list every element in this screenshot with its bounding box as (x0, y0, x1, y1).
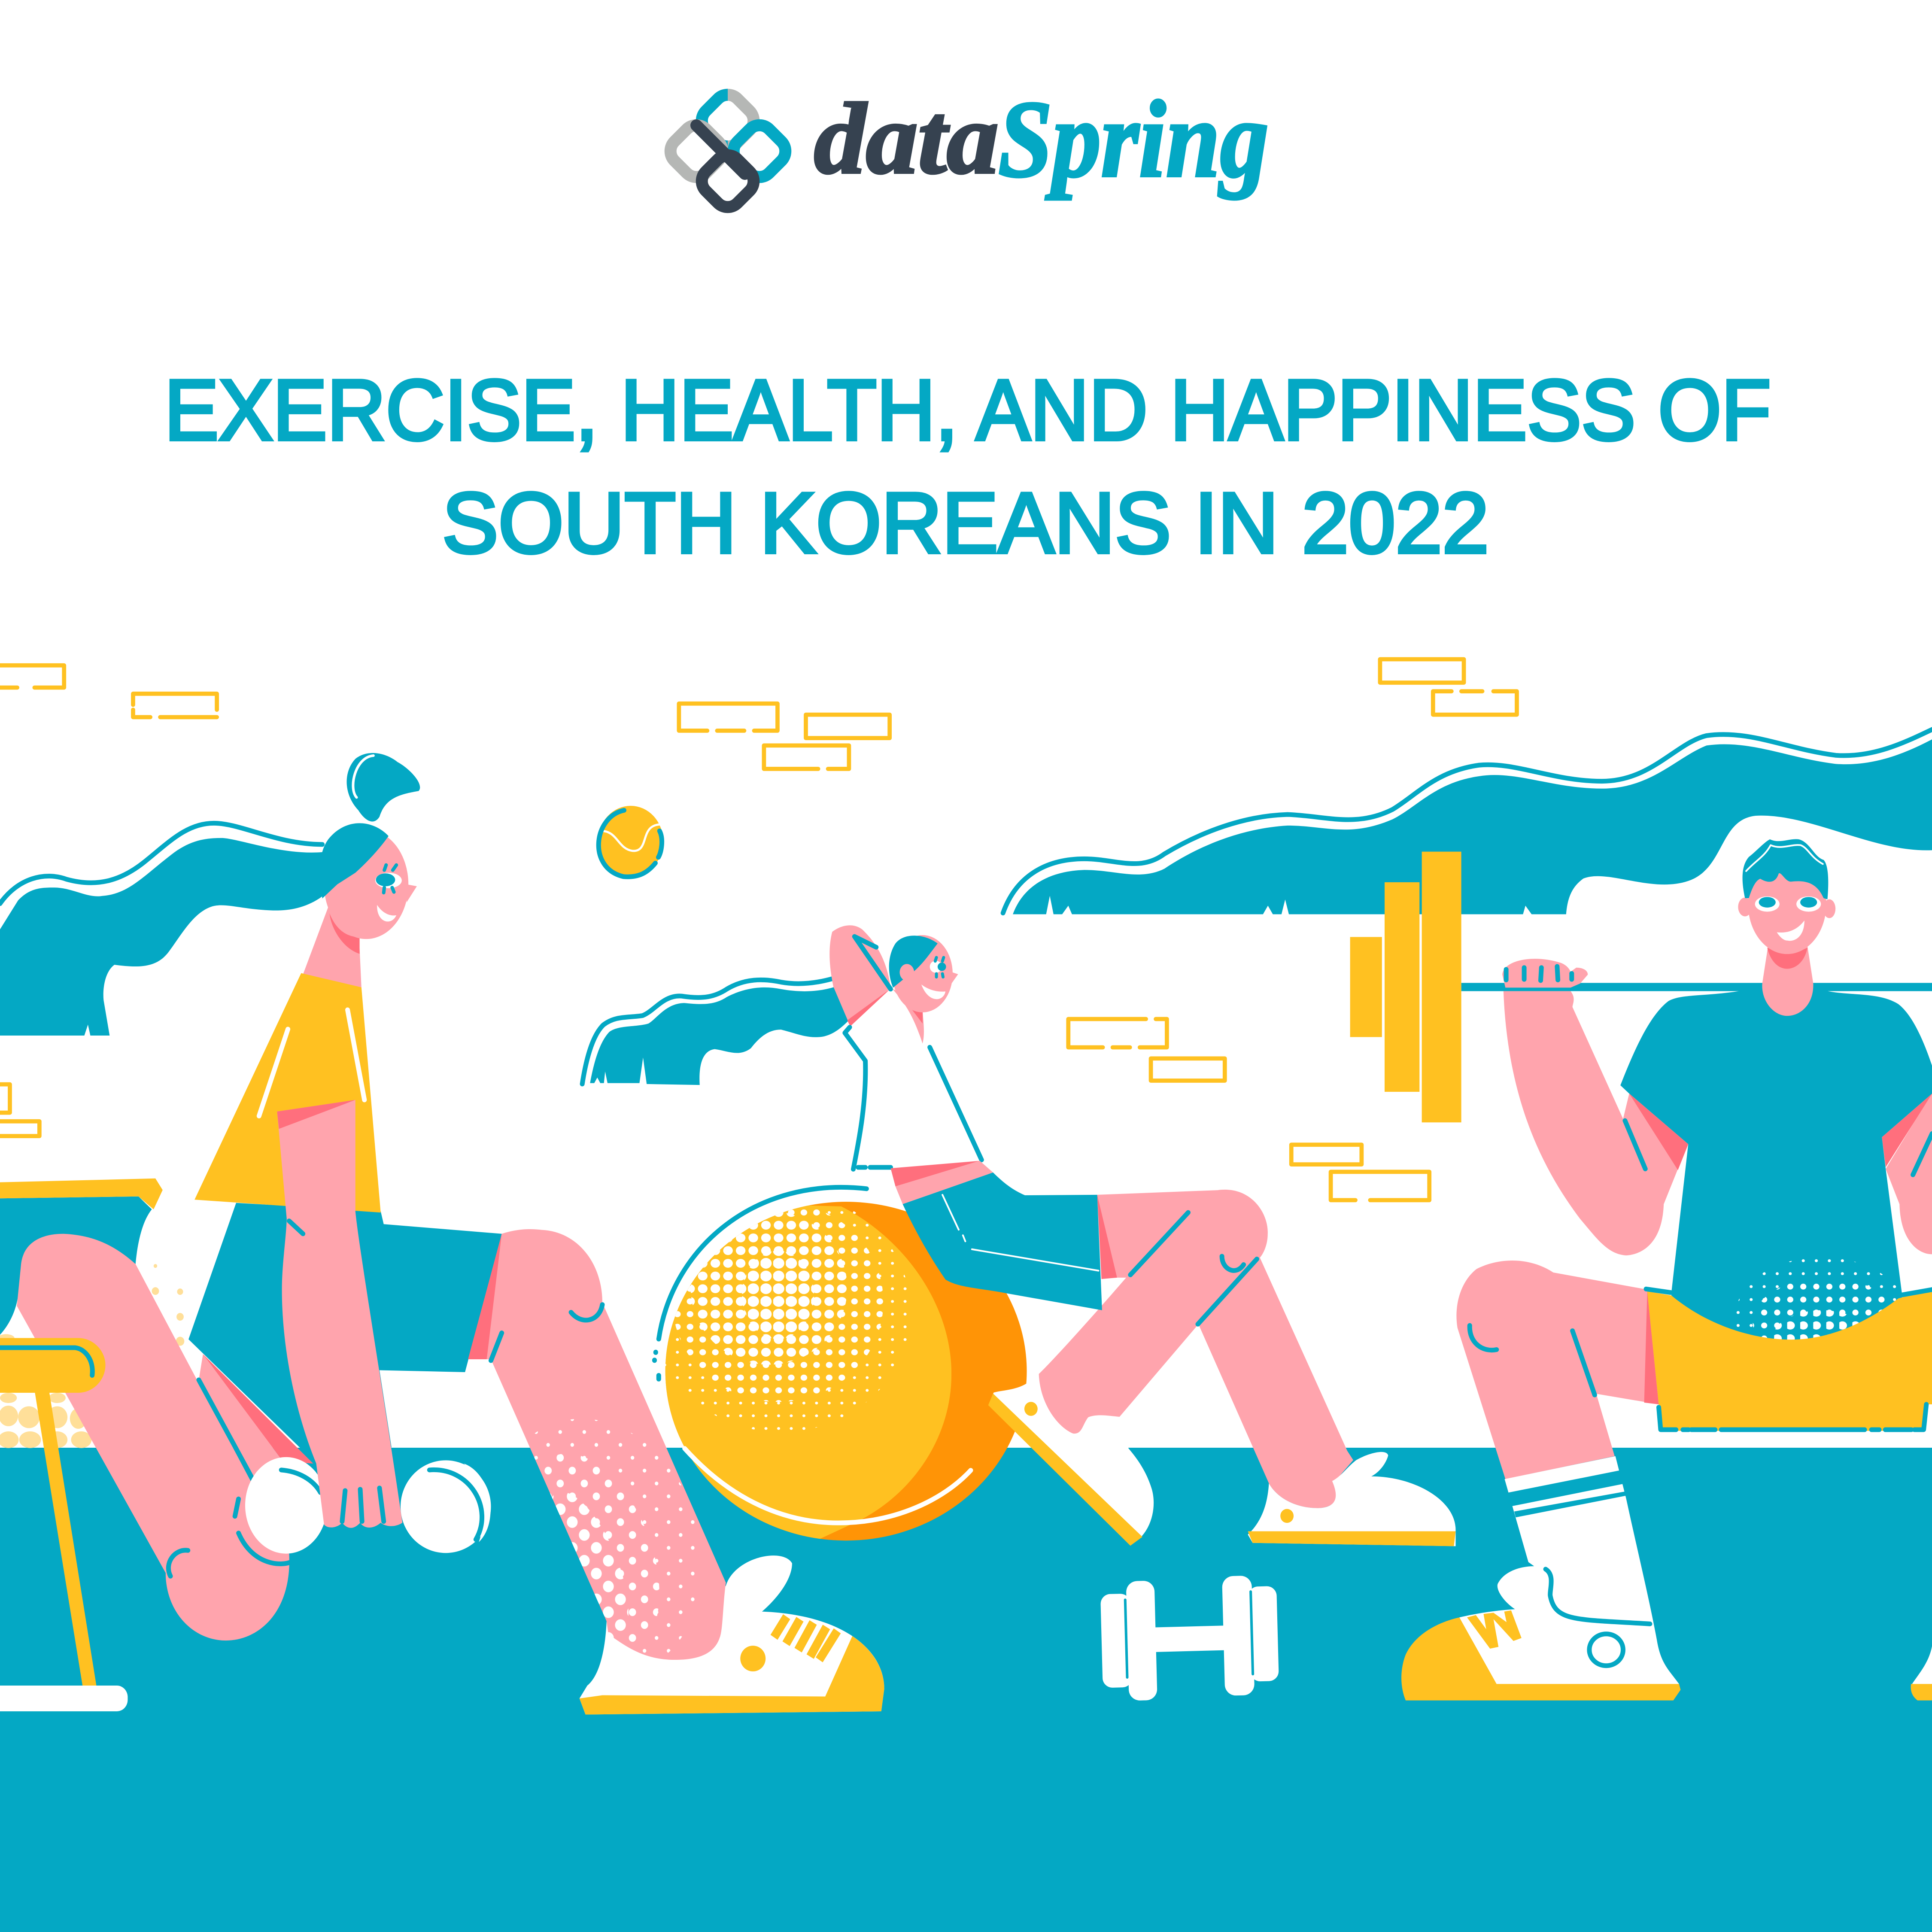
lower leg (1198, 1258, 1353, 1508)
ball orange body (665, 1202, 1027, 1540)
dumbbell left weight (235, 1457, 327, 1564)
left leg details (168, 1380, 251, 1576)
hair (582, 978, 850, 1085)
sneaker (580, 1555, 884, 1714)
bench back (0, 1179, 163, 1335)
logo wordmark: data (814, 83, 999, 195)
woman on gym ball (582, 925, 1455, 1546)
title: SOUTH KOREANS IN 2022 (442, 475, 1489, 571)
ball yellow face (665, 1206, 951, 1539)
yellow outlined bricks (0, 659, 1517, 1200)
tennis ball (598, 806, 663, 877)
dumbbell on floor (1100, 1575, 1279, 1701)
white top outline (845, 1027, 981, 1169)
raised arm (829, 925, 890, 1027)
thigh (1456, 1261, 1659, 1479)
head (889, 935, 958, 1044)
logo icon: interlocking diamonds (665, 89, 791, 213)
shorts and far leg (188, 1203, 502, 1479)
second sneaker at edge (1911, 1646, 1932, 1701)
leg halftone (470, 1373, 759, 1683)
front leg (468, 1229, 884, 1714)
hand gripping bar (1502, 959, 1588, 987)
sock and sneaker (1401, 1456, 1680, 1701)
rear sneaker (988, 1381, 1154, 1546)
arm holding dumbbell (277, 1100, 402, 1528)
left leg (17, 1234, 289, 1640)
title: EXERCISE, HEALTH, AND HAPPINESS OF (164, 362, 1771, 458)
ball teal outline arc (654, 1187, 866, 1379)
title (164, 362, 1771, 571)
t-shirt (1620, 987, 1932, 1346)
teal floor (0, 1448, 1932, 1932)
woman's head (320, 823, 417, 939)
bench seat and leg (0, 1338, 128, 1711)
logo: dataSpring (665, 79, 1269, 213)
halftone highlight (665, 1209, 907, 1430)
shirt halftone (1735, 1257, 1908, 1375)
barbell plates (1350, 852, 1461, 1122)
right arm (1882, 1092, 1932, 1254)
man's head (1738, 839, 1835, 954)
yellow t-shirt (194, 907, 381, 1212)
front sneaker (1248, 1452, 1455, 1546)
pale yellow dots (0, 1264, 184, 1448)
gym ball (648, 1187, 1027, 1549)
hair bun (347, 753, 420, 821)
barbell (1350, 852, 1932, 1122)
barbell lifter's flowing hair (1003, 729, 1932, 914)
pink leg (486, 1229, 726, 1660)
barbell bar (1461, 983, 1932, 991)
raised arm (1504, 991, 1688, 1255)
ball white rim arc (685, 1449, 971, 1523)
logo wordmark accent: Spring (998, 79, 1269, 200)
neck (1762, 946, 1813, 1016)
woman with dumbbells (0, 753, 884, 1714)
dumbbell right weight (401, 1460, 491, 1553)
thigh (1039, 1190, 1268, 1434)
yellow shorts (1646, 1289, 1932, 1431)
hair (0, 823, 386, 1036)
man lifting barbell (1401, 839, 1932, 1701)
shorts (890, 1161, 1102, 1310)
